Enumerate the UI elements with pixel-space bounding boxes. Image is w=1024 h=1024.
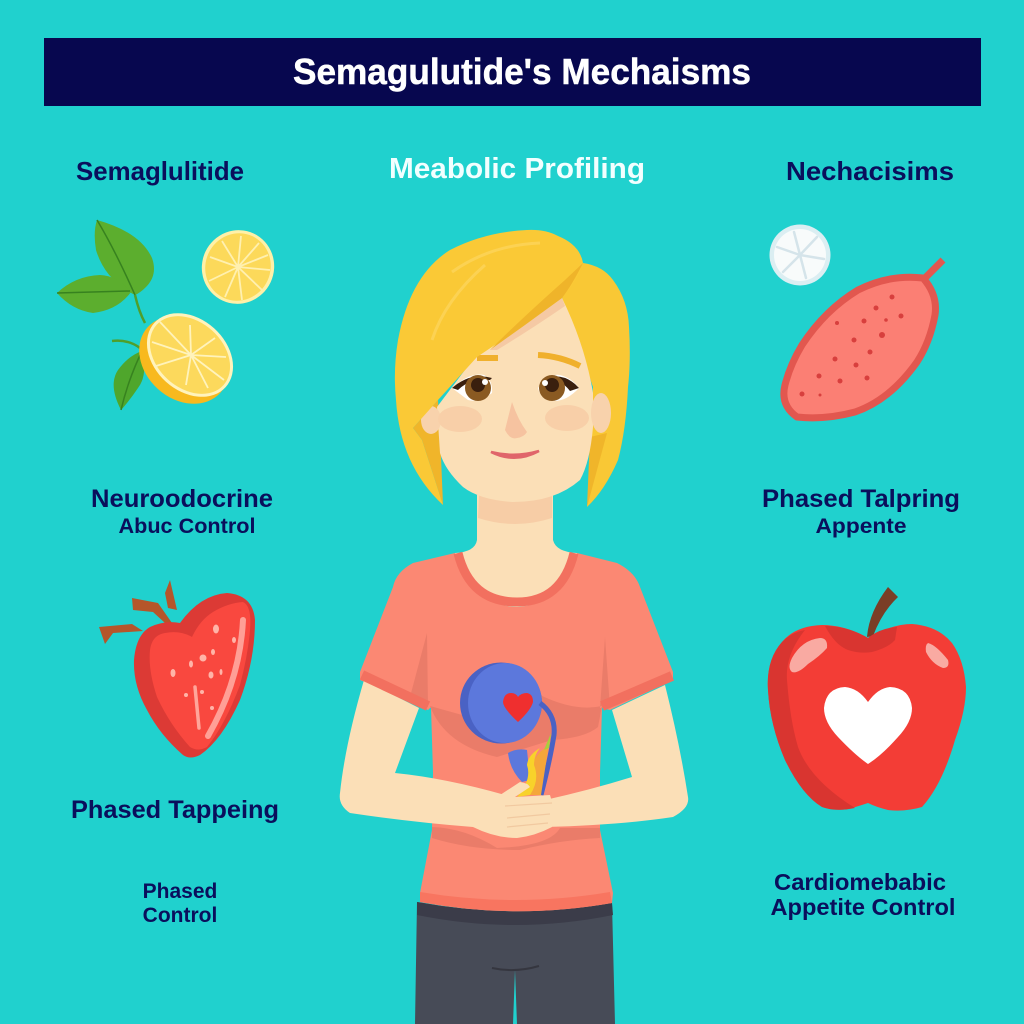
shirt collar band [458,553,574,602]
sleeve bands [362,675,672,706]
orange ribbon [525,737,550,795]
blue disc [460,662,542,744]
text: Cardiomebabic Appetite Control [770,869,956,920]
mouth [491,451,539,458]
left eye [452,375,492,401]
back hair right [562,263,630,507]
eyebrows [477,355,580,366]
text: Phased Talpring Appente: Phased Talpring [762,485,960,513]
text: Cardiomebabic Appetite Control: Appetite Control [770,894,956,920]
heading: Meabolic Profiling: Meabolic Profiling [389,153,645,185]
face [437,298,593,502]
clasped hand [473,782,553,838]
icon: leaves and lemons [57,218,286,422]
waistband [417,902,613,925]
shirt hem [420,892,612,911]
nose [505,402,527,438]
ears [421,393,611,434]
blue disc face [468,663,542,743]
title banner [44,38,981,106]
heading: Semaglulitide: Semaglulitide [76,156,244,186]
text: Phased Control [143,880,217,927]
central figure: woman [340,230,688,1024]
hair underside strands [413,400,607,507]
icon: red organ [784,260,943,418]
blue tube [540,703,554,795]
text: Phased Control: Control [143,904,217,927]
trouser crease [492,966,539,970]
text: Neuroodocrine Abuc Control: Abuc Control [118,515,256,538]
text: Neuroodocrine Abuc Control: Neuroodocrine [91,485,273,513]
blue lower lobe [508,749,530,782]
trousers [415,902,615,1024]
fringe shadow on forehead [490,298,565,350]
text: Phased Control: Phased [143,880,217,903]
green ribbon tip [544,733,551,750]
finger lines [505,803,552,827]
hair parting shadow [490,263,583,350]
text: Phased Talpring Appente: Appente [816,515,906,538]
text: Phased Tappeing: Phased Tappeing [71,796,279,824]
shirt shading [410,633,610,850]
icon: apple with heart [768,587,966,811]
cheeks [438,405,589,432]
heading: Nechacisims: Nechacisims [786,156,954,186]
text: Phased Talpring Appente [762,485,960,538]
organ illustration [460,662,554,797]
right arm [545,685,688,827]
hair highlight [432,243,540,340]
text: Cardiomebabic Appetite Control: Cardiomebabic [774,869,946,895]
neck [455,495,577,607]
right eye [538,375,579,401]
neck shadow [478,495,552,524]
icon: strawberry heart [99,580,255,758]
left arm [340,680,505,830]
t-shirt body [360,553,673,911]
icon: white tablet [770,224,830,286]
text: Neuroodocrine Abuc Control [91,485,273,538]
yellow ribbon [517,748,540,797]
red heart [503,693,533,722]
front hair [395,230,583,505]
title banner: Semagulutide's Mechaisms [293,51,751,92]
